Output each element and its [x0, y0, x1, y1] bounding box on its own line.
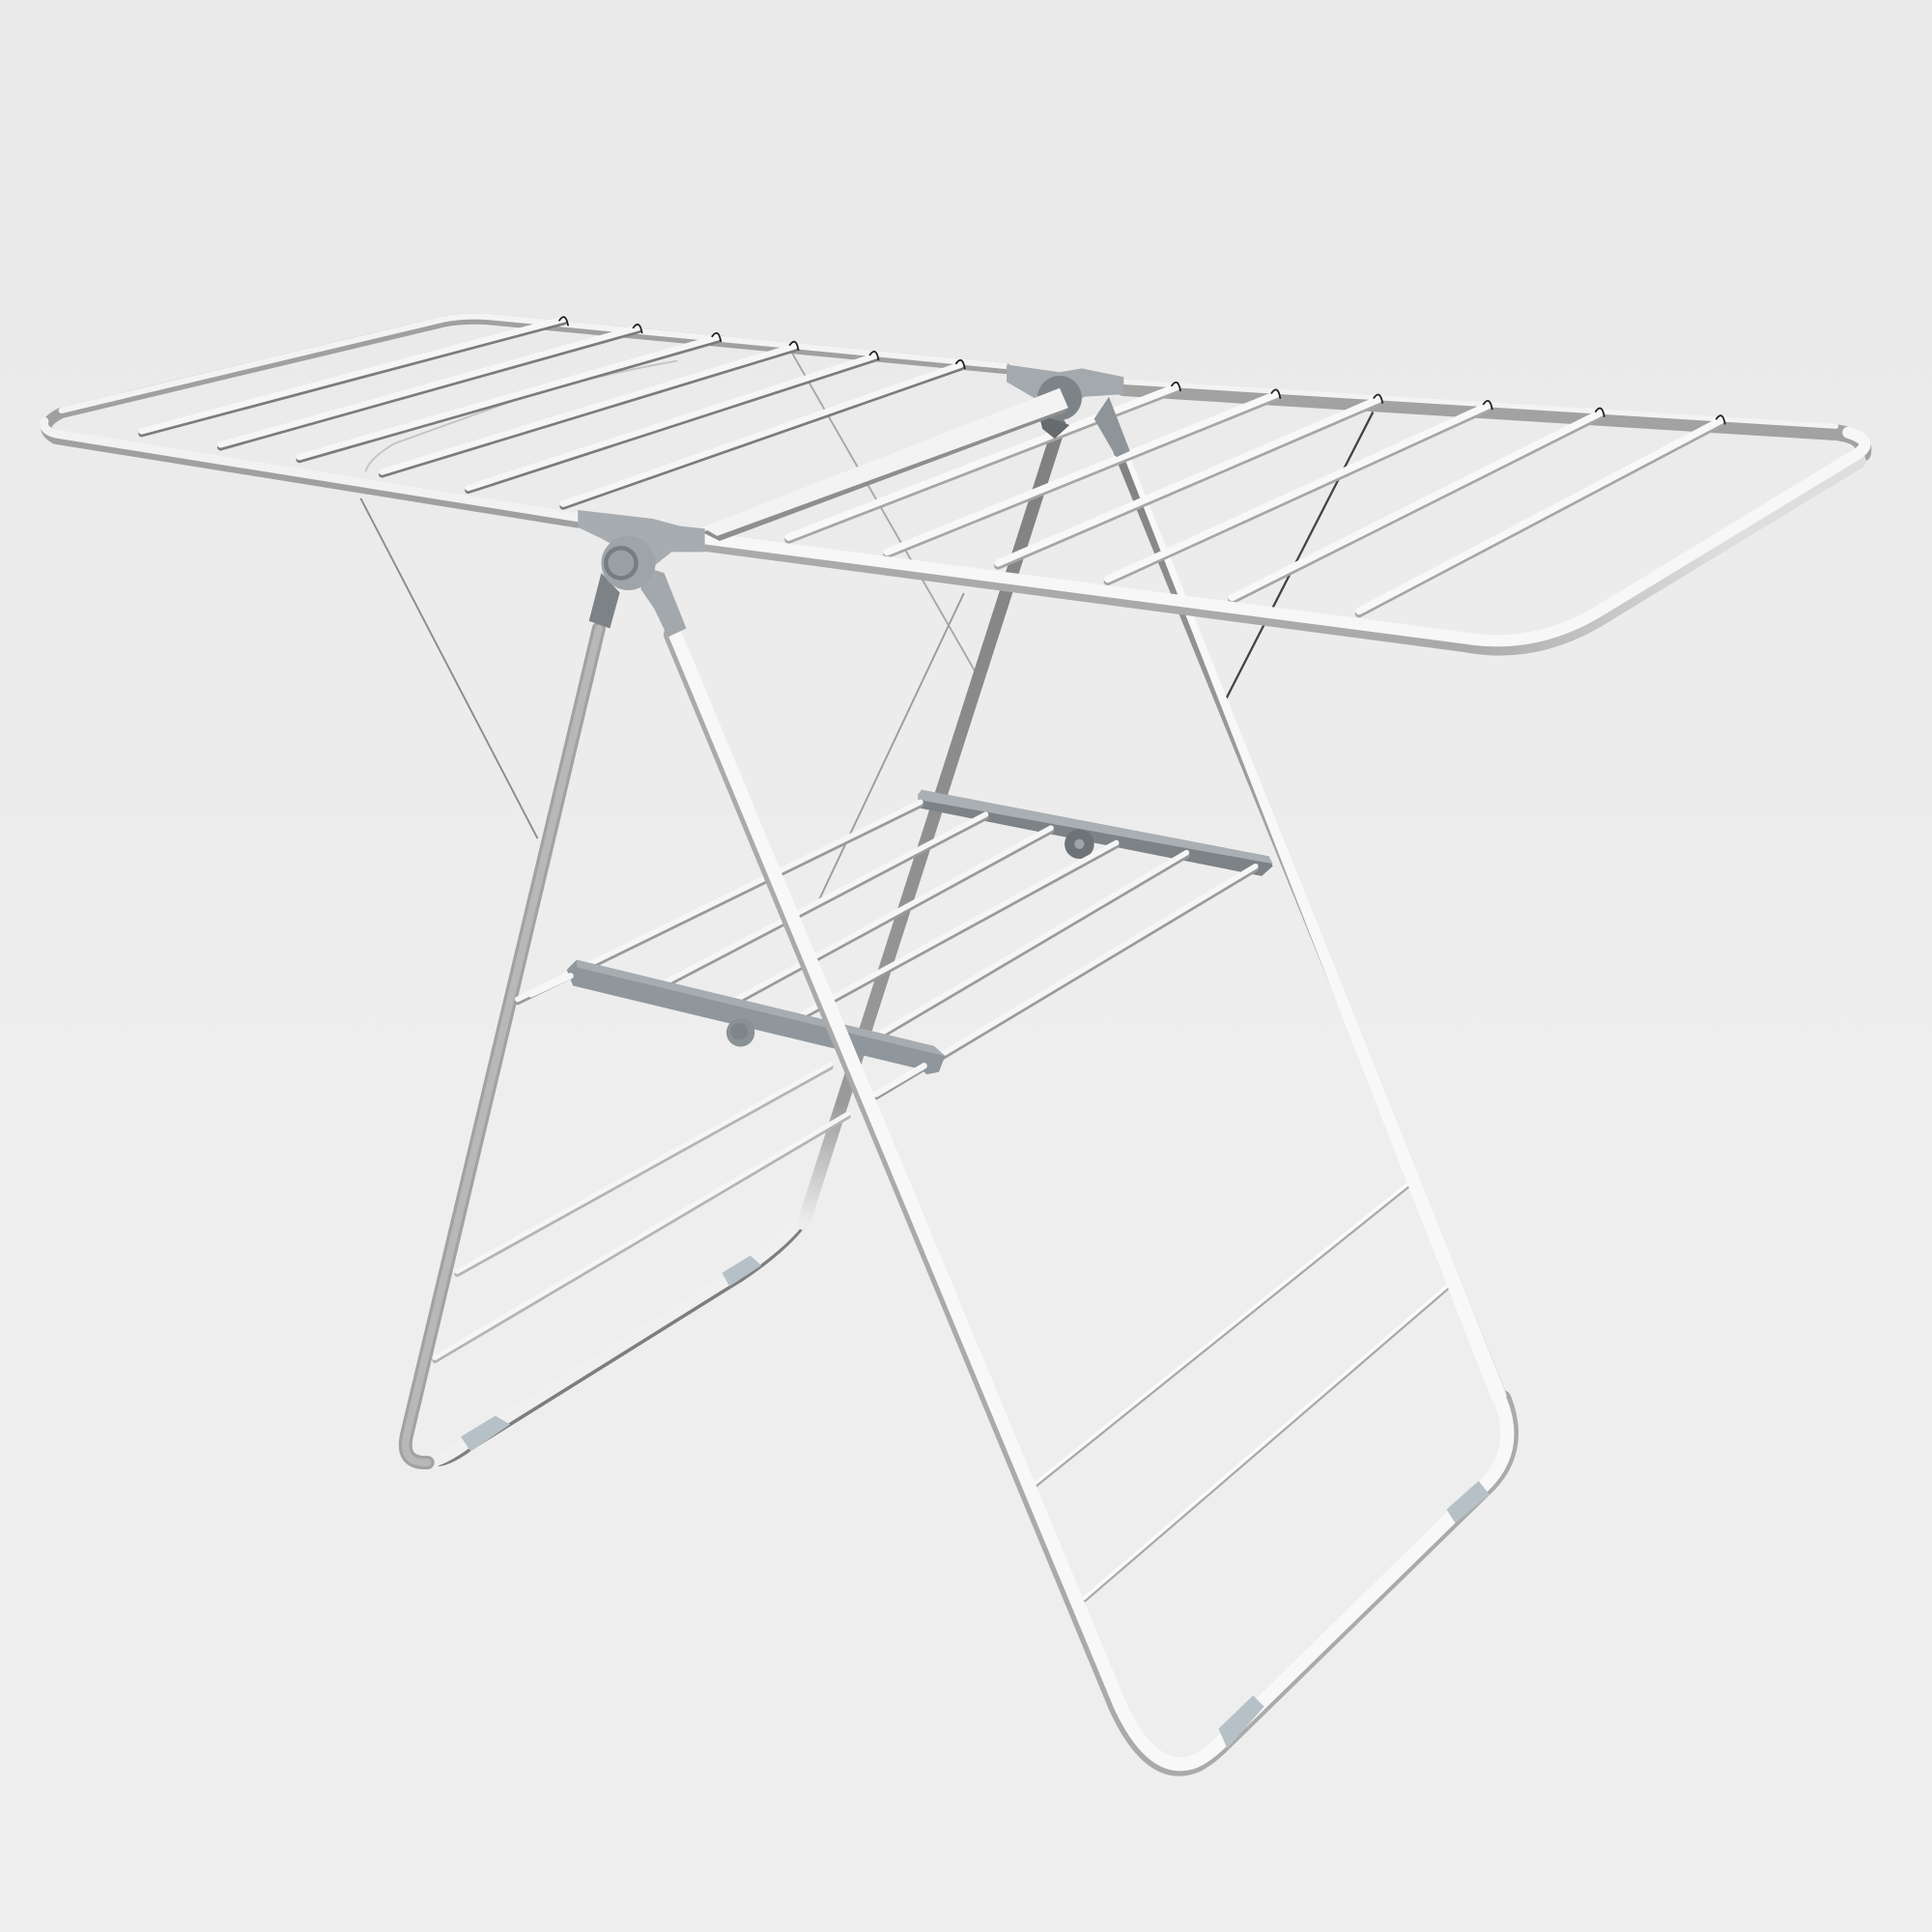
foot caps	[461, 1256, 1490, 1748]
front left leg and foot bar	[671, 635, 1511, 1768]
front tube left	[44, 421, 578, 518]
rear hinge hub	[1007, 365, 1130, 457]
right leg socket	[640, 567, 686, 637]
cap: front foot right	[1446, 1481, 1490, 1523]
cap: rear foot left	[461, 1416, 510, 1452]
cap: rear foot right	[722, 1256, 761, 1287]
lower front hanging wires	[1035, 1181, 1454, 1601]
rear right leg	[804, 425, 1060, 1224]
cap: front foot left	[1218, 1695, 1264, 1748]
wire hooks on rear tube	[559, 317, 1725, 424]
front tube of top frame	[44, 421, 1864, 647]
front bar knob	[726, 1018, 754, 1047]
top rack wires right section	[788, 387, 1721, 613]
front tube and right end	[705, 433, 1864, 647]
front right leg highlight	[1119, 441, 1507, 1401]
top rack wires left section	[142, 319, 961, 506]
top centre rod	[702, 388, 1068, 541]
front bar end wires	[531, 976, 924, 1094]
folding support arms	[361, 352, 1373, 902]
rear bar knob	[1065, 829, 1094, 859]
front hinge hub	[578, 510, 705, 637]
front leg frame	[671, 441, 1511, 1768]
middle shelf rear gray bar	[918, 790, 1273, 876]
rear left leg	[406, 629, 599, 1463]
rear foot bar	[428, 1218, 801, 1463]
rear tube of top frame	[46, 316, 1863, 523]
rear leg frame	[406, 425, 1060, 1463]
middle shelf front gray bar	[531, 960, 945, 1094]
lower rear hanging wires	[435, 1065, 848, 1360]
rear tube left and left end	[46, 316, 1006, 523]
front right leg upper	[1115, 443, 1506, 1405]
rear tube right	[1123, 382, 1863, 453]
left leg socket	[589, 573, 620, 629]
middle shelf wires	[518, 802, 1256, 1096]
